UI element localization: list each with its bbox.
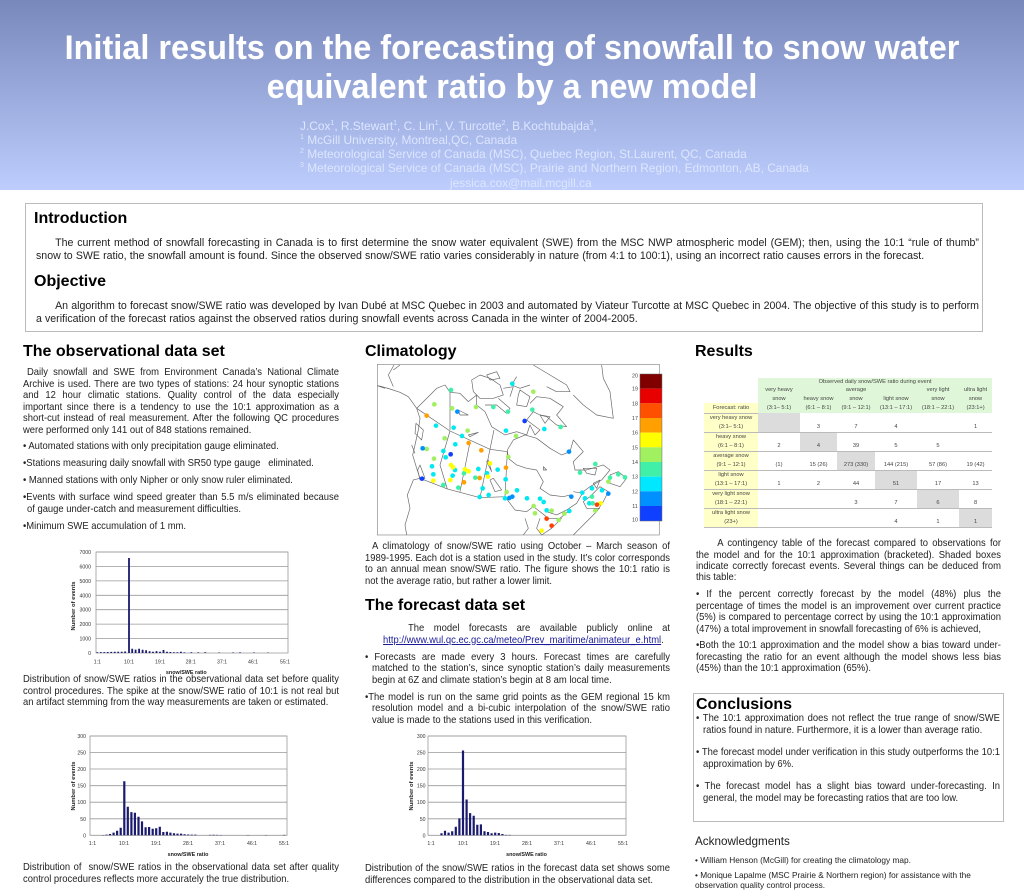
chart: distribution after quality control: 200 (77, 767, 86, 773)
contingency table: 7 (894, 500, 898, 506)
contingency table: (3:1– 5:1) (767, 405, 791, 411)
text: forecast data set: • Forecasts are made every 3 hours. Forecast times are carefully (365, 652, 670, 662)
colour bar: 20 (632, 373, 638, 379)
station dots (420, 381, 627, 533)
chart: distribution before quality control: 1:1 (94, 660, 101, 666)
title (65, 29, 959, 106)
contingency table: 144 (215) (884, 462, 908, 468)
chart: distribution before quality control: 3000 (79, 608, 91, 614)
heading: objective: Objective (34, 273, 106, 290)
contingency table: (6:1 – 8:1) (718, 442, 744, 448)
caption: first histogram: control procedures. The spike at the snow/SWE ratio of 10:1 is not real but (23, 686, 339, 696)
chart: forecast data set distribution: 50 (420, 817, 426, 823)
chart: forecast data set distribution: 100 (417, 800, 426, 806)
text: climatology: 1989-1995. Each dot is a station used in the study. It’s color corresponds (365, 552, 670, 564)
contingency table: 1 (974, 518, 977, 524)
heading: introduction: Introduction (34, 210, 127, 227)
text: results: •Both the 10:1 approximation and the model show a bias toward under- (696, 640, 1000, 651)
text: results: A contingency table of the forecast compared to observations for (717, 538, 1000, 549)
chart: distribution before quality control: 7000 (79, 550, 91, 556)
contingency table: (18:1 – 22:1) (715, 500, 747, 506)
contingency table: 1 (777, 480, 781, 486)
contingency table: 51 (893, 480, 899, 486)
contingency table: 1 (936, 518, 940, 524)
text: forecast data set: The model forecasts are available publicly online at (408, 623, 670, 634)
chart: distribution before quality control: 37:1 (217, 660, 227, 666)
contingency table: 17 (935, 480, 941, 486)
chart: distribution after quality control: 100 (77, 800, 86, 806)
colour bar: 15 (632, 445, 638, 451)
chart: forecast data set distribution: 1:1 (427, 841, 435, 847)
chart: distribution before quality control: 55:1 (280, 660, 290, 666)
title: Initial results on the forecasting of snowfall to snow water (65, 29, 959, 67)
contingency table: 1 (974, 424, 977, 430)
chart: distribution before quality control: Number of events (71, 582, 77, 630)
colour bar: 17 (632, 416, 638, 422)
text: observational data set: Archive is used. There are two types of stations: 24 hour synoptic stations (23, 378, 339, 390)
text: conclusions: ratios found in nature. Furthermore, it is a lower than average ratio. (703, 724, 982, 736)
text: conclusions: • The forecast model has a slight bias toward under-forecasting. In (696, 781, 1000, 792)
text: observational data set: •Events with surface wind speed greater than 5.5 m/s eliminated because (23, 492, 339, 503)
text: forecast data set (365, 623, 670, 726)
text: observational data set: and 12 hour climatic stations. Quality control of the data especially (23, 390, 339, 401)
contingency table: 3 (817, 424, 820, 430)
text: results: the model and for the 10:1 approximation (bracketed). Shaded boxes (696, 550, 1000, 560)
caption: second histogram: Distribution of snow/SWE ratios in the observational data set after quality (23, 862, 339, 873)
contingency table: average snow (713, 452, 749, 458)
text: results: this table: (696, 572, 736, 583)
colour bar: 10 (632, 517, 638, 523)
contingency table: (23:1+) (966, 405, 985, 411)
contingency table: (13:1 – 17:1) (880, 405, 912, 411)
text: results: (5%) is compared to percentage correct by using the 10:1 approximation (696, 612, 1000, 623)
text: observational data set: • Automated stations with only precipitation gauge eliminated. (23, 441, 279, 452)
text: observational data set: were performed only 141 out of 848 stations remained. (23, 424, 251, 436)
contingency table: 6 (936, 500, 940, 506)
contingency table: Observed daily snow/SWE ratio during event (819, 379, 931, 385)
chart: forecast data set distribution: 150 (417, 784, 426, 790)
chart: distribution after quality control: 19:1 (151, 841, 161, 847)
heading: conclusions: Conclusions (696, 696, 792, 713)
title: equivalent ratio by a new model (267, 68, 757, 106)
authors and affiliations (300, 119, 809, 190)
chart: distribution after quality control: 55:1 (279, 841, 289, 847)
chart: forecast data set distribution: 300 (417, 734, 426, 740)
contingency table: 13 (972, 480, 979, 486)
acknowledgments: • William Henson (McGill) for creating the climatology map. (695, 855, 911, 865)
chart: distribution after quality control: 300 (77, 734, 86, 740)
panel: conclusions (693, 693, 1004, 822)
text: conclusions: general, the model may be forecasting ratios that are too low. (703, 792, 958, 804)
chart: forecast data set distribution: 250 (417, 750, 426, 756)
text: observational data set: of gauge under-catch and measurement difficulties. (27, 504, 241, 514)
caption: second histogram: control procedures reflects more accurately the true distribution. (23, 874, 289, 885)
coastlines (377, 365, 627, 535)
colour bar (632, 373, 662, 523)
contingency table: 19 (42) (967, 462, 985, 468)
text: introduction: snow to SWE ratio, the snowfall amount is found. Since the observed snow/SWE ratio varies considerably in nature (from 4:1 to 100:1), using an incorrect ratio causes errors in the forecast. (36, 250, 924, 262)
contingency table: 57 (86) (929, 462, 947, 468)
acknowledgments: Acknowledgments (695, 835, 790, 848)
contingency table: 5 (936, 442, 940, 448)
text: results (696, 538, 1001, 674)
contingency table: 3 (854, 500, 858, 506)
chart: distribution before quality control: 6000 (79, 564, 91, 570)
contingency table: Forecast: ratio (713, 404, 749, 410)
text: results: • If the percent correctly forecast by the model (48%) plus the (696, 589, 1000, 600)
heading: observational data set: The observational data set (23, 343, 225, 360)
caption: forecast histogram: Distribution of the snow/SWE ratios in the forecast data set shows some (365, 863, 670, 874)
text: forecast data set: value is made to the stations used in this verification. (372, 714, 592, 726)
chart: distribution after quality control: 250 (77, 750, 86, 756)
colour bar: 14 (632, 460, 638, 466)
text: climatology: A climatology of snow/SWE ratio using October – March season of (372, 541, 670, 552)
contingency table: snow (849, 396, 863, 402)
caption: first histogram (23, 674, 339, 708)
chart: distribution before quality control: 46:1 (248, 660, 258, 666)
text: objective (36, 300, 979, 325)
text: observational data set: Daily snowfall and SWE from Environment Canada’s National Climate (27, 367, 339, 378)
authors and affiliations: 1 McGill University, Montreal,QC, Canada (300, 133, 517, 147)
chart: distribution after quality control: 46:1 (247, 841, 257, 847)
chart: distribution after quality control: 28:1 (183, 841, 193, 847)
chart: distribution after quality control: 1:1 (89, 841, 96, 847)
colour bar: 12 (632, 489, 638, 495)
chart: distribution after quality control: Number of events (71, 762, 77, 810)
contingency table: very light snow (712, 490, 750, 496)
chart: distribution after quality control: 0 (83, 833, 86, 839)
contingency table: 5 (894, 442, 898, 448)
chart: distribution before quality control: 1000 (79, 637, 91, 643)
colour bar: 18 (632, 401, 638, 407)
text: objective: An algorithm to forecast snow/SWE ratio was developed by Ivan Dubé at MSC Quebec in 2003 and automated by Viateur Turcotte at MSC Quebec in 2004. The objective of this study is to perform (55, 300, 979, 312)
text: forecast data set: begin at 6Z and climate station’s begin at 8 am local time. (372, 674, 612, 686)
text: observational data set (23, 367, 339, 532)
contingency table: heavy snow (803, 396, 834, 402)
text: forecast data set: resolution model and a bi-cubic interpolation of the snow/SWE ratio (372, 703, 670, 714)
contingency table: (13:1 – 17:1) (715, 480, 747, 486)
chart: forecast data set distribution: 28:1 (522, 841, 532, 847)
text: introduction (36, 237, 979, 262)
contingency table: 273 (330) (844, 462, 868, 468)
chart: distribution after quality control: 50 (80, 817, 86, 823)
contingency table: (9:1 – 12:1) (841, 405, 871, 411)
text: climatology: to an annual mean snow/SWE ratio. The figure shows the 10:1 ratio is (365, 564, 670, 575)
text: results: (45%) than the 10:1 approximation (65%). (696, 663, 870, 674)
contingency table: light snow (883, 396, 909, 402)
chart: distribution before quality control: 10:1 (124, 660, 134, 666)
chart: distribution before quality control: 19:1 (155, 660, 165, 666)
text: results: percentage of times the model is an improvement over current practice (696, 600, 1000, 612)
contingency table: snow (969, 396, 982, 402)
header banner (0, 0, 1024, 190)
chart: forecast data set distribution: 0 (423, 833, 426, 839)
caption: forecast histogram (365, 863, 670, 886)
chart: forecast data set distribution: 37:1 (554, 841, 564, 847)
colour bar: 13 (632, 475, 638, 481)
contingency table: 2 (777, 442, 781, 448)
colour bar: 11 (632, 504, 638, 510)
colour bar: 16 (632, 431, 638, 437)
acknowledgments: • Monique Lapalme (MSC Prairie & Northern region) for assistance with the (695, 870, 971, 880)
chart: distribution before quality control: 4000 (79, 593, 91, 599)
contingency table: very heavy snow (710, 414, 752, 420)
acknowledgments (695, 835, 971, 890)
chart: distribution before quality control: 28:1 (186, 660, 196, 666)
contingency table: (1) (776, 462, 782, 468)
text: climatology (365, 541, 670, 586)
chart: distribution after quality control: 10:1 (119, 841, 129, 847)
text: conclusions: • The forecast model under verification in this study outperforms the 10:1 (696, 747, 1000, 758)
caption: second histogram (23, 862, 339, 885)
contingency table: (9:1 – 12:1) (716, 462, 746, 468)
contingency table: snow (772, 396, 786, 402)
authors and affiliations: 2 Meteorological Service of Canada (MSC), Quebec Region, St.Laurent, QC, Canada (300, 147, 747, 161)
text: climatology: not the average ratio, but rather a lower limit. (365, 576, 552, 586)
contingency table: ultra light (964, 387, 987, 393)
province borders (417, 392, 507, 498)
contingency table: ultra light snow (712, 510, 750, 516)
contingency table: 39 (853, 442, 859, 448)
chart: distribution before quality control: 5000 (79, 579, 91, 585)
text: observational data set: •Minimum SWE accumulation of 1 mm. (23, 521, 186, 532)
chart: forecast data set distribution: 55:1 (618, 841, 628, 847)
contingency table: 7 (854, 424, 858, 430)
chart: distribution after quality control: 37:1 (215, 841, 225, 847)
text: forecast data set: •The model is run on the same grid points as the GEM regional 15 km (365, 692, 670, 702)
contingency table: (23+) (724, 518, 738, 524)
panel: introduction and objective (25, 203, 983, 332)
chart: forecast data set distribution: 10:1 (458, 841, 468, 847)
contingency table: heavy snow (716, 434, 746, 440)
text: conclusions (696, 713, 1000, 804)
caption: first histogram: an artifact stemming from the way measurements are taken or estimated. (23, 697, 328, 708)
chart: forecast data set distribution: 200 (417, 767, 426, 773)
heading: climatology: Climatology (365, 343, 457, 360)
text: conclusions: approximation by 6%. (703, 758, 794, 770)
contingency table: snow (931, 396, 945, 402)
text: results: indicate correctly forecast events. Several things can be deduced from (696, 560, 1000, 572)
text: objective: a verification of the forecast ratios against the observed ratios during snowfall events across Canada in the winter of 2004-2005. (36, 313, 638, 325)
contingency table: 4 (817, 442, 820, 448)
chart: distribution before quality control: 0 (88, 651, 91, 657)
contingency table: 44 (853, 480, 859, 486)
text: observational data set: short-cut instead of real measurement. After the following QC procedures (23, 413, 339, 424)
contingency table: light snow (718, 472, 744, 478)
contingency table: (18:1 – 22:1) (922, 405, 954, 411)
chart: distribution after quality control: 150 (77, 784, 86, 790)
text: forecast data set: http://www.wul.qc.ec.gc.ca/meteo/Prev_maritime/animateur_e.html. (383, 634, 664, 646)
text: observational data set: important since there is a tendency to use the 10:1 approximation as a (23, 402, 339, 412)
contingency table: 8 (974, 500, 977, 506)
authors and affiliations: jessica.cox@mail.mcgill.ca (450, 176, 592, 190)
chart: forecast data set distribution: snow/SWE ratio (506, 852, 548, 858)
text: introduction: The current method of snowfall forecasting in Canada is to first determine the snow water equivalent (SWE) from the MSC NWP atmospheric model (GEM); then, using the 10:1 “rule of thumb” (55, 237, 979, 249)
contingency table: 4 (894, 424, 898, 430)
caption: forecast histogram: differences compared to the distribution in the observational data set. (365, 875, 653, 886)
contingency table: very light (927, 387, 949, 393)
contingency table: (3:1– 5:1) (719, 424, 743, 430)
contingency table: 2 (817, 480, 820, 486)
contingency table: 4 (894, 518, 898, 524)
colour bar: 19 (632, 387, 638, 393)
chart: distribution after quality control: snow/SWE ratio (168, 852, 209, 858)
chart: distribution before quality control: 2000 (79, 622, 91, 628)
contingency table: very heavy (765, 387, 793, 393)
authors and affiliations: J.Cox1, R.Stewart1, C. Lin1, V. Turcotte2, B.Kochtubajda3, (300, 119, 597, 133)
text: results: forecasting the ratio for an event although the model shows less bias (696, 652, 1000, 662)
chart: forecast data set distribution: 19:1 (490, 841, 500, 847)
text: observational data set: • Manned stations with only Nipher or only snow ruler eliminated. (23, 475, 293, 486)
chart: forecast data set distribution: 46:1 (586, 841, 596, 847)
heading: forecast data set: The forecast data set (365, 597, 525, 614)
chart: distribution before quality control: snow/SWE ratio (166, 670, 207, 676)
acknowledgments: observation quality control process. (695, 880, 825, 890)
contingency table (704, 378, 992, 528)
caption: first histogram: Distribution of snow/SWE ratios in the observational data set before quality (23, 674, 339, 685)
contingency table: 15 (26) (809, 462, 828, 468)
text: results: (47%) a total improvement in snowfall forecasting of 6% is achieved, (696, 624, 980, 634)
text: observational data set: •Stations measuring daily snowfall with SR50 type gauge eliminated. (23, 458, 314, 469)
contingency table: (6:1 – 8:1) (806, 405, 831, 411)
text: forecast data set: matched to the station’s, since synoptic station’s daily measurements (372, 663, 670, 674)
heading: results: Results (695, 343, 753, 360)
contingency table: average (846, 387, 866, 393)
text: conclusions: • The 10:1 approximation does not reflect the true range of snow/SWE (696, 713, 1000, 724)
authors and affiliations: 3 Meteorological Service of Canada (MSC), Prairie and Northern Region, Edmonton, AB, Canada (300, 161, 809, 175)
chart: forecast data set distribution: Number of events (409, 762, 415, 810)
